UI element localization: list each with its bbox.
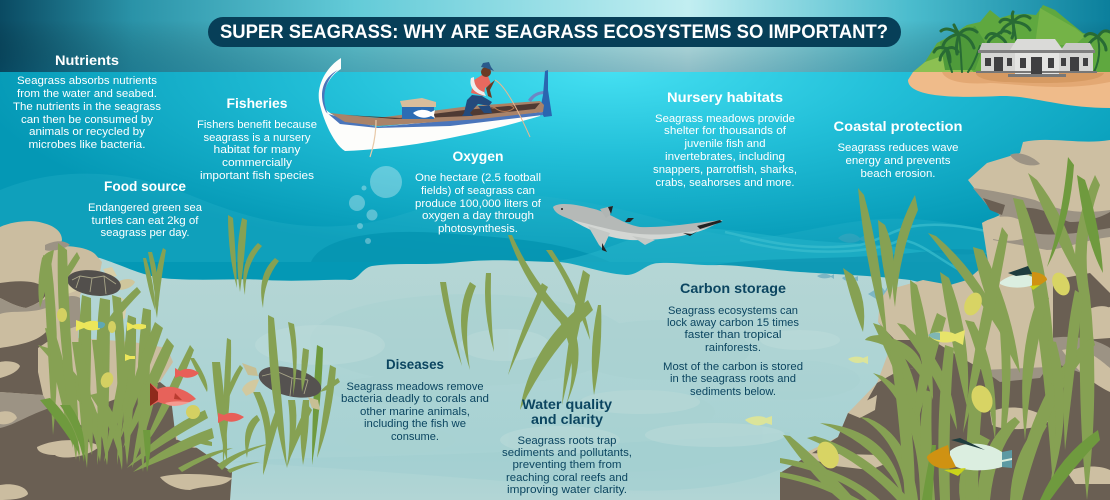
text: carbon storage (663, 281, 803, 398)
text: carbon storage: Carbon storage (680, 281, 787, 296)
left fish (57, 308, 244, 423)
island: palms (934, 12, 1110, 72)
text: nutrients: microbes like bacteria. (28, 139, 146, 151)
shark (553, 204, 723, 252)
turtle: upper left (62, 267, 135, 322)
text: nursery habitats: Seagrass meadows provide (655, 113, 795, 125)
text: diseases: bacteria deadly to corals and (341, 393, 489, 405)
grass: midwater clumps (143, 215, 601, 410)
text: fisheries (197, 96, 317, 182)
text: coastal protection (834, 119, 962, 180)
fish: yellow striped (76, 320, 146, 361)
text: carbon storage: sediments below. (690, 386, 776, 398)
text: food source: Food source (104, 179, 186, 194)
text: coastal protection: beach erosion. (860, 168, 936, 180)
text: nutrients: Nutrients (55, 53, 119, 68)
fish: large red (150, 383, 196, 406)
text: nursery habitats: snappers, parrotfish, sharks, (653, 164, 797, 176)
text: fisheries: Fisheries (226, 96, 288, 111)
fish: faded yellow (745, 356, 868, 425)
text: diseases: including the fish we (364, 418, 466, 430)
title banner (208, 17, 901, 47)
seed clusters (57, 308, 202, 421)
text: carbon storage: Seagrass ecosystems can (668, 305, 798, 317)
text: fisheries: habitat for many (214, 144, 301, 156)
text: oxygen (415, 149, 542, 235)
text: water quality and clarity: Water quality (522, 397, 613, 412)
text: water quality and clarity: Seagrass roots trap (518, 435, 616, 447)
text: oxygen: oxygen a day through (422, 210, 534, 222)
text: coastal protection: Seagrass reduces wave (838, 142, 958, 154)
text: oxygen: fields) of seagrass can (421, 185, 535, 197)
text: water quality and clarity: improving water clarity. (507, 484, 627, 496)
text: water quality and clarity: and clarity (531, 412, 604, 427)
text: fisheries: seagrass is a nursery (204, 132, 311, 144)
turtle: lower middle (242, 361, 324, 410)
deck (330, 101, 544, 126)
text: nursery habitats (653, 90, 797, 189)
island: building (976, 39, 1097, 77)
grass: right edge clump (780, 173, 1100, 500)
distant fish silhouettes (817, 234, 887, 301)
island (908, 5, 1110, 108)
bubbles (349, 166, 402, 244)
right fish (745, 266, 1047, 476)
text: nutrients: can then be consumed by (21, 114, 154, 126)
text: oxygen: photosynthesis. (438, 223, 518, 235)
grass: darker right blades (922, 157, 1103, 500)
island: trees hill (913, 5, 1110, 74)
text: nursery habitats: shelter for thousands of (664, 125, 787, 137)
text: water quality and clarity: reaching coral reefs and (506, 472, 628, 484)
text: nutrients: Seagrass absorbs nutrients (17, 75, 158, 87)
text: nursery habitats: juvenile fish and (683, 138, 766, 150)
text: carbon storage: rainforests. (705, 342, 761, 354)
text: carbon storage: faster than tropical (684, 329, 782, 341)
text: oxygen: produce 100,000 liters of (415, 198, 542, 210)
sea water (0, 72, 1110, 312)
text: nutrients: from the water and seabed. (17, 88, 157, 100)
fisher (462, 62, 530, 137)
title banner: SUPER SEAGRASS: WHY ARE SEAGRASS ECOSYSTEMS SO IMPORTANT? (220, 22, 888, 43)
boat with fisher (319, 58, 552, 157)
text: nursery habitats: invertebrates, including (665, 151, 785, 163)
text: nursery habitats: Nursery habitats (667, 90, 783, 105)
fish: large parrotfish (927, 438, 1012, 476)
sky background (0, 0, 1110, 73)
text: food source (88, 179, 203, 239)
text: food source: turtles can eat 2kg of (92, 215, 199, 227)
fish: small parrotfish (1000, 266, 1047, 290)
island: sand (908, 72, 1110, 108)
text: carbon storage: in the seagrass roots and (670, 373, 796, 385)
text: water quality and clarity (502, 397, 632, 496)
text: diseases: consume. (391, 431, 439, 443)
text: fisheries: commercially (222, 157, 293, 169)
text: nursery habitats: crabs, seahorses and more. (656, 177, 794, 189)
right seed clusters (813, 270, 1073, 472)
text: water quality and clarity: sediments and pollutants, (502, 447, 632, 459)
text: carbon storage: lock away carbon 15 times (667, 317, 799, 329)
text: diseases (341, 357, 489, 443)
grass: left meadow (38, 243, 233, 472)
text: food source: Endangered green sea (88, 202, 203, 214)
text: nutrients: animals or recycled by (29, 126, 146, 138)
text: diseases: other marine animals, (360, 406, 470, 418)
stern post (528, 91, 545, 102)
seabed (50, 250, 1000, 500)
anchor rope (370, 120, 376, 157)
text: fisheries: Fishers benefit because (197, 119, 317, 131)
grass: blades over turtle (268, 315, 309, 468)
hull (319, 58, 543, 151)
text: food source: seagrass per day. (100, 227, 190, 239)
text: oxygen: One hectare (2.5 football (415, 172, 541, 184)
text: diseases: Seagrass meadows remove (346, 381, 484, 393)
fish: blue-yellow stripes (928, 330, 965, 345)
rock: right (780, 140, 1110, 500)
text: diseases: Diseases (386, 357, 444, 372)
text: water quality and clarity: preventing them from (512, 459, 622, 471)
cooler (400, 98, 436, 119)
rock: left (0, 221, 232, 500)
text: oxygen: Oxygen (452, 149, 504, 164)
grass: central meadow (190, 338, 340, 475)
fish: small red (175, 368, 244, 423)
text: coastal protection: Coastal protection (834, 119, 962, 134)
text: nutrients: The nutrients in the seagrass (13, 101, 162, 113)
text: carbon storage: Most of the carbon is stored (663, 361, 803, 373)
text: nutrients (13, 53, 162, 151)
text: fisheries: important fish species (200, 170, 315, 182)
text: coastal protection: energy and prevents (846, 155, 951, 167)
